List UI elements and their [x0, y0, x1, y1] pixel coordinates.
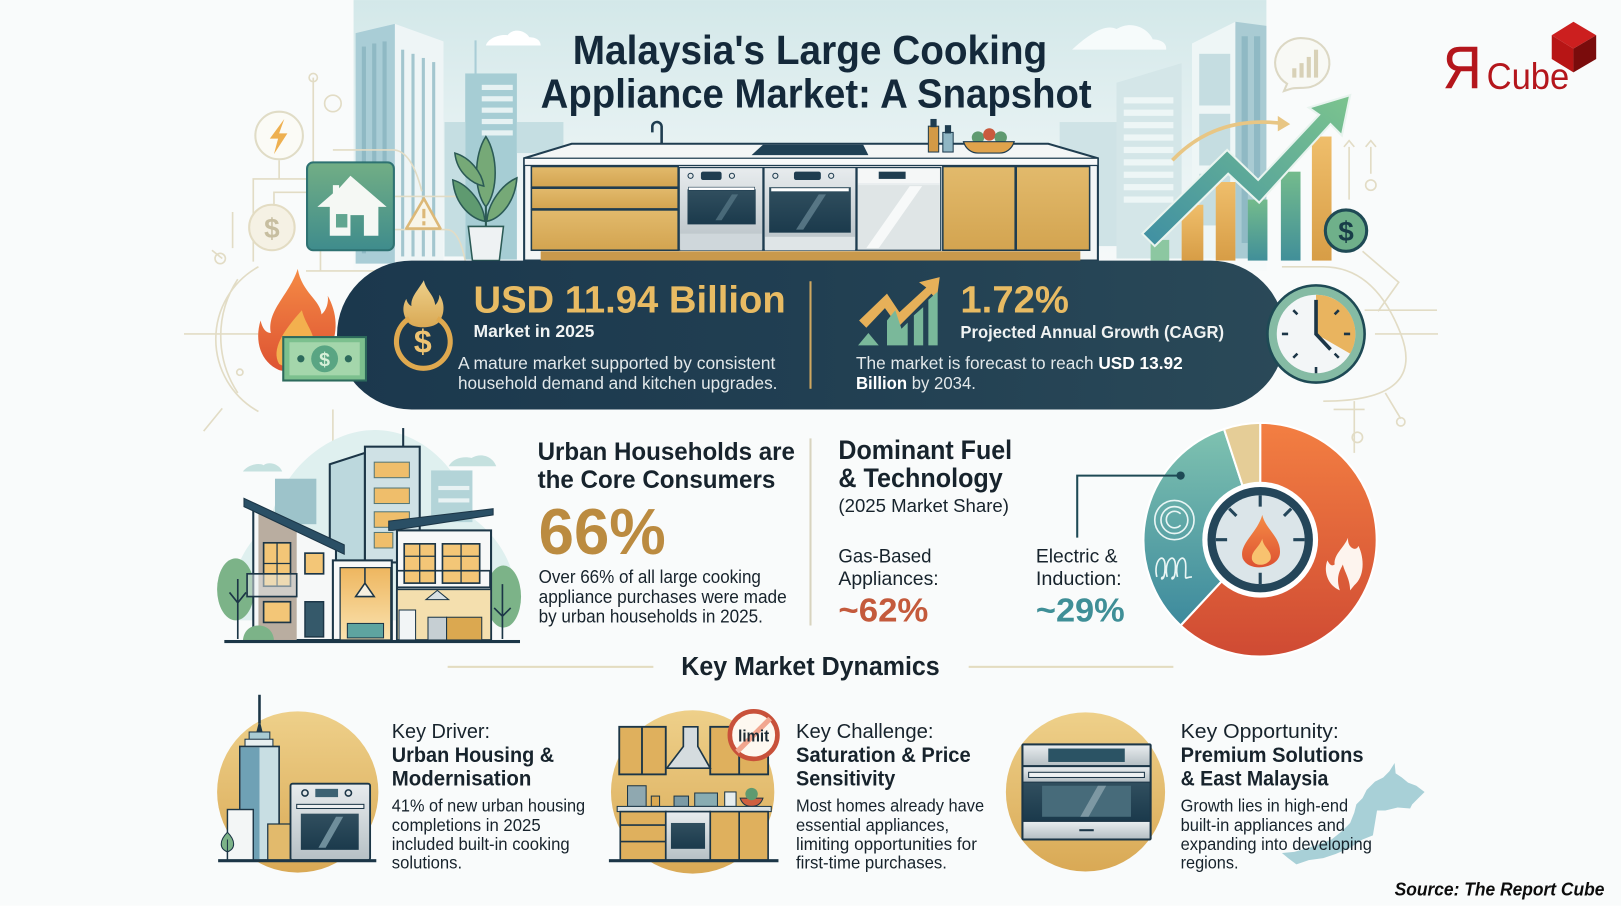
- text block: dominant fuel: ~62%: [838, 592, 928, 629]
- text block: dominant fuel: [838, 435, 1125, 629]
- oven one: [679, 168, 763, 250]
- icon: house tile: [307, 162, 394, 250]
- oven two: [764, 168, 856, 250]
- text block: urban households: the Core Consumers: [538, 466, 775, 494]
- right background buildings: [1060, 22, 1266, 259]
- donut chart: fuel share: [1077, 423, 1377, 657]
- metric: market size: A mature market supported by consistent: [458, 353, 775, 373]
- text block: dominant fuel: Induction:: [1036, 568, 1122, 590]
- text block: key opportunity: & East Malaysia: [1181, 768, 1329, 791]
- limit sign: [730, 711, 777, 759]
- pepper shakers and bowl: [928, 119, 1014, 153]
- icon: flame money ring: $: [414, 324, 432, 360]
- text block: key opportunity: Growth lies in high-end: [1181, 796, 1348, 816]
- text block: key driver: completions in 2025: [392, 815, 541, 835]
- text block: dominant fuel: ~29%: [1036, 592, 1125, 629]
- metric: CAGR: The market is forecast to reach USD 13.92: [856, 353, 1183, 373]
- metric: CAGR: Projected Annual Growth (CAGR): [960, 322, 1224, 342]
- metric: market size: USD 11.94 Billion: [473, 278, 786, 321]
- left circuit lines: [184, 73, 465, 461]
- text block: key driver: 41% of new urban housing: [392, 796, 585, 816]
- text block: key opportunity: built-in appliances and: [1181, 815, 1345, 835]
- icon: kitchen with limit sign: [609, 710, 778, 874]
- drawers: [531, 167, 678, 250]
- sky backdrop panel: [354, 0, 1266, 271]
- title: Malaysia's Large Cooking: [573, 28, 1047, 73]
- icon: built-in oven: [1006, 712, 1165, 872]
- text block: key opportunity: regions.: [1181, 852, 1238, 872]
- illustration: urban homes: [217, 428, 521, 643]
- kitchen counter illustration: [524, 119, 1098, 261]
- dishwasher: [857, 168, 941, 250]
- text block: dominant fuel: (2025 Market Share): [838, 495, 1009, 516]
- logo: RCube: [1443, 22, 1596, 101]
- faucet and sink: [616, 122, 696, 155]
- metric: market size: household demand and kitchen upgrades.: [458, 373, 777, 393]
- text block: dominant fuel: & Technology: [838, 463, 1003, 493]
- icon: tower and oven: [217, 695, 378, 873]
- metric: CAGR: [856, 278, 1224, 393]
- text block: key challenge: limiting opportunities for: [796, 834, 977, 854]
- logo: RCube: Я: [1443, 36, 1481, 101]
- text block: key driver: Urban Housing &: [392, 744, 554, 767]
- title: [541, 28, 1092, 117]
- text block: urban households: [538, 438, 795, 626]
- title: Appliance Market: A Snapshot: [541, 72, 1092, 117]
- text block: urban households: 66%: [539, 495, 666, 568]
- text block: key driver: Key Driver:: [392, 720, 490, 743]
- text block: urban households: by urban households in 2025.: [539, 606, 763, 626]
- text block: dominant fuel: Electric &: [1036, 545, 1118, 567]
- text block: dominant fuel: Gas-Based: [838, 545, 931, 567]
- text block: key opportunity: Premium Solutions: [1181, 744, 1364, 767]
- text block: key challenge: Key Challenge:: [796, 720, 934, 743]
- callout line: [1077, 471, 1185, 538]
- icon: speech bubble chart: [1275, 38, 1329, 91]
- icon: dollar coin: [249, 205, 295, 250]
- text block: dominant fuel: Dominant Fuel: [838, 435, 1012, 465]
- text block: key opportunity: expanding into developing: [1181, 834, 1372, 854]
- text block: key driver: Modernisation: [392, 768, 531, 791]
- icon: flame money ring: [396, 280, 450, 368]
- icon: potted plant: [453, 137, 517, 261]
- icon: flame with cash: $: [319, 349, 330, 371]
- text block: urban households: Over 66% of all large cooking: [539, 567, 761, 587]
- icon: wall clock: [1267, 285, 1365, 383]
- icon: growth chart: [858, 277, 940, 345]
- text block: key driver: included built-in cooking: [392, 834, 570, 854]
- icon: green dollar coin: $: [1338, 216, 1354, 247]
- panel: market summary banner: [337, 261, 1285, 409]
- hob: [752, 145, 868, 155]
- icon: green dollar coin: [1325, 210, 1367, 251]
- map: East Malaysia: [1282, 763, 1425, 864]
- right circuit lines: [1282, 141, 1438, 453]
- text block: key challenge: first-time purchases.: [796, 852, 947, 872]
- text block: key driver: [392, 720, 585, 872]
- text block: key challenge: [796, 720, 984, 872]
- source note: Source: The Report Cube: [1395, 879, 1604, 899]
- growth chart with arrow: [1142, 95, 1350, 261]
- text block: key driver: solutions.: [392, 852, 462, 872]
- text block: key challenge: Sensitivity: [796, 768, 895, 791]
- icon: lightning bolt: [255, 112, 303, 159]
- text block: dominant fuel: Appliances:: [838, 568, 939, 590]
- text block: key challenge: Saturation & Price: [796, 744, 971, 767]
- text block: key opportunity: Key Opportunity:: [1181, 720, 1339, 743]
- text block: urban households: Urban Households are: [538, 438, 795, 466]
- right cabinets: [943, 167, 1090, 250]
- metric: CAGR: Billion by 2034.: [856, 373, 976, 393]
- metric: market size: [458, 278, 786, 393]
- text block: key opportunity: [1181, 720, 1372, 872]
- icon: flame with cash: [258, 269, 366, 380]
- metric: CAGR: 1.72%: [960, 278, 1069, 321]
- logo: RCube: Cube: [1487, 55, 1569, 97]
- metric: market size: Market in 2025: [473, 321, 595, 341]
- text block: key challenge: Most homes already have: [796, 796, 984, 816]
- icon: dollar coin: $: [264, 213, 280, 244]
- left background buildings: [356, 24, 563, 264]
- heading: key market dynamics: Key Market Dynamics: [681, 653, 940, 681]
- text block: key challenge: essential appliances,: [796, 815, 949, 835]
- text block: urban households: appliance purchases were made: [539, 587, 787, 607]
- icon: warning triangle: [406, 199, 440, 229]
- limit sign: limit: [738, 726, 770, 745]
